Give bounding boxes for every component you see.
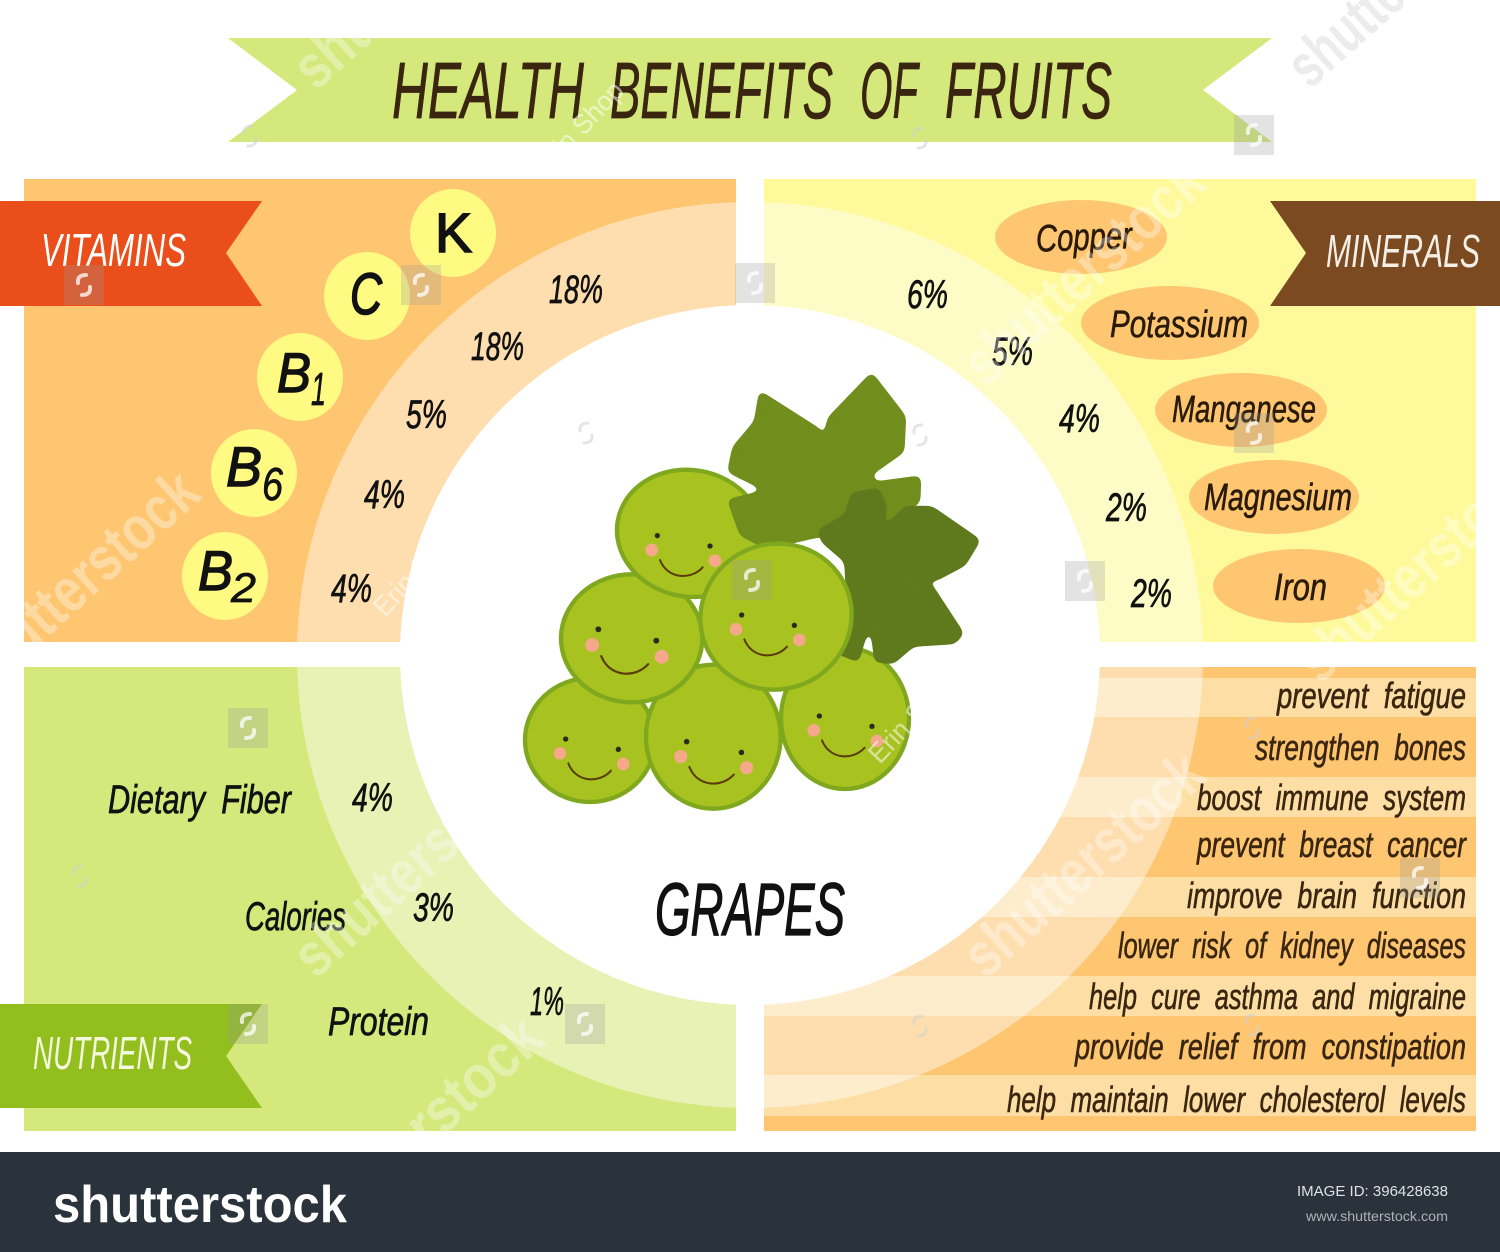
vitamin percentages: 18% (471, 325, 524, 369)
vitamin B6: B (226, 435, 262, 498)
vitamin B1 (257, 333, 343, 421)
copper: Copper (1035, 215, 1134, 261)
vitamin C: C (350, 262, 383, 327)
vitamin B6 (211, 429, 297, 517)
watermark overlay: Erin Shop (862, 664, 963, 769)
vitamin K (410, 189, 496, 277)
illustration: grape bunch (525, 373, 980, 809)
watermark overlay: Erin Shop (529, 75, 630, 180)
nutrient percentages: 1% (530, 980, 564, 1024)
panel: nutrients background (24, 667, 736, 1131)
vitamin B6: 6 (262, 458, 283, 510)
vitamin percentages: 4% (364, 473, 405, 517)
banner: vitamins (0, 201, 262, 306)
vitamin B1: 1 (311, 363, 326, 415)
fruit name: GRAPES (655, 868, 845, 951)
vitamin B1: B (277, 341, 311, 404)
footer bar (0, 1152, 1500, 1252)
watermark overlay: shutterstock (949, 738, 1219, 990)
title banner: FRUITS (945, 46, 1112, 135)
vitamin K: K (435, 201, 472, 264)
copper (995, 200, 1167, 274)
mineral percentages: 2% (1105, 486, 1147, 530)
panel: vitamins background (24, 179, 736, 642)
nutrient names: Calories (245, 895, 346, 939)
mineral percentages (907, 273, 1172, 616)
vitamin B2: 2 (230, 564, 256, 611)
vitamin percentages: 5% (406, 393, 447, 437)
benefits list (1007, 675, 1467, 1120)
central ring and white circle (297, 202, 1203, 1108)
nutrient names: Dietary Fiber (108, 778, 292, 822)
nutrient percentages (352, 776, 564, 1024)
magnesium (1189, 460, 1359, 534)
nutrient names (108, 778, 429, 1044)
title banner: HEALTH (392, 46, 584, 135)
panel: minerals background (764, 179, 1476, 642)
potassium (1081, 286, 1259, 360)
image id: IMAGE ID: 396428638 (1297, 1183, 1448, 1200)
iron: Iron (1274, 567, 1327, 609)
watermark overlay: shutterstock (949, 146, 1219, 398)
watermark overlay: rstock (391, 1002, 557, 1160)
footer logo: shutterstock (53, 1176, 347, 1234)
vitamin badges (182, 189, 496, 620)
iron (1213, 549, 1385, 623)
banner: minerals (1270, 201, 1500, 306)
vitamin percentages (331, 268, 603, 611)
banner: vitamins: VITAMINS (41, 224, 186, 276)
magnesium: Magnesium (1204, 477, 1352, 519)
manganese: Manganese (1172, 389, 1316, 431)
nutrient percentages: 4% (352, 776, 393, 820)
vitamin B2: B (198, 539, 233, 602)
mineral percentages: 6% (907, 273, 948, 317)
mineral percentages: 4% (1059, 397, 1100, 441)
vitamin percentages: 4% (331, 567, 372, 611)
watermark overlay: shutterstock (279, 738, 549, 990)
banner: nutrients (0, 1004, 262, 1108)
mineral name pills (995, 200, 1385, 623)
vitamin percentages: 18% (549, 268, 603, 312)
nutrient percentages: 3% (413, 886, 454, 930)
title banner: OF (860, 46, 920, 135)
banner: nutrients: NUTRIENTS (33, 1027, 192, 1079)
title banner: BENEFITS (610, 46, 833, 135)
nutrient names: Protein (328, 1000, 429, 1044)
site address: www.shutterstock.com (1305, 1208, 1448, 1224)
vitamin C (324, 252, 410, 340)
mineral percentages: 5% (992, 330, 1033, 374)
manganese (1155, 373, 1327, 447)
title banner (228, 38, 1272, 142)
watermark overlay: Erin Shop (367, 517, 468, 622)
mineral percentages: 2% (1130, 572, 1172, 616)
potassium: Potassium (1110, 304, 1248, 346)
panel: benefits striped background (764, 667, 1476, 1131)
vitamin B2 (182, 532, 268, 620)
